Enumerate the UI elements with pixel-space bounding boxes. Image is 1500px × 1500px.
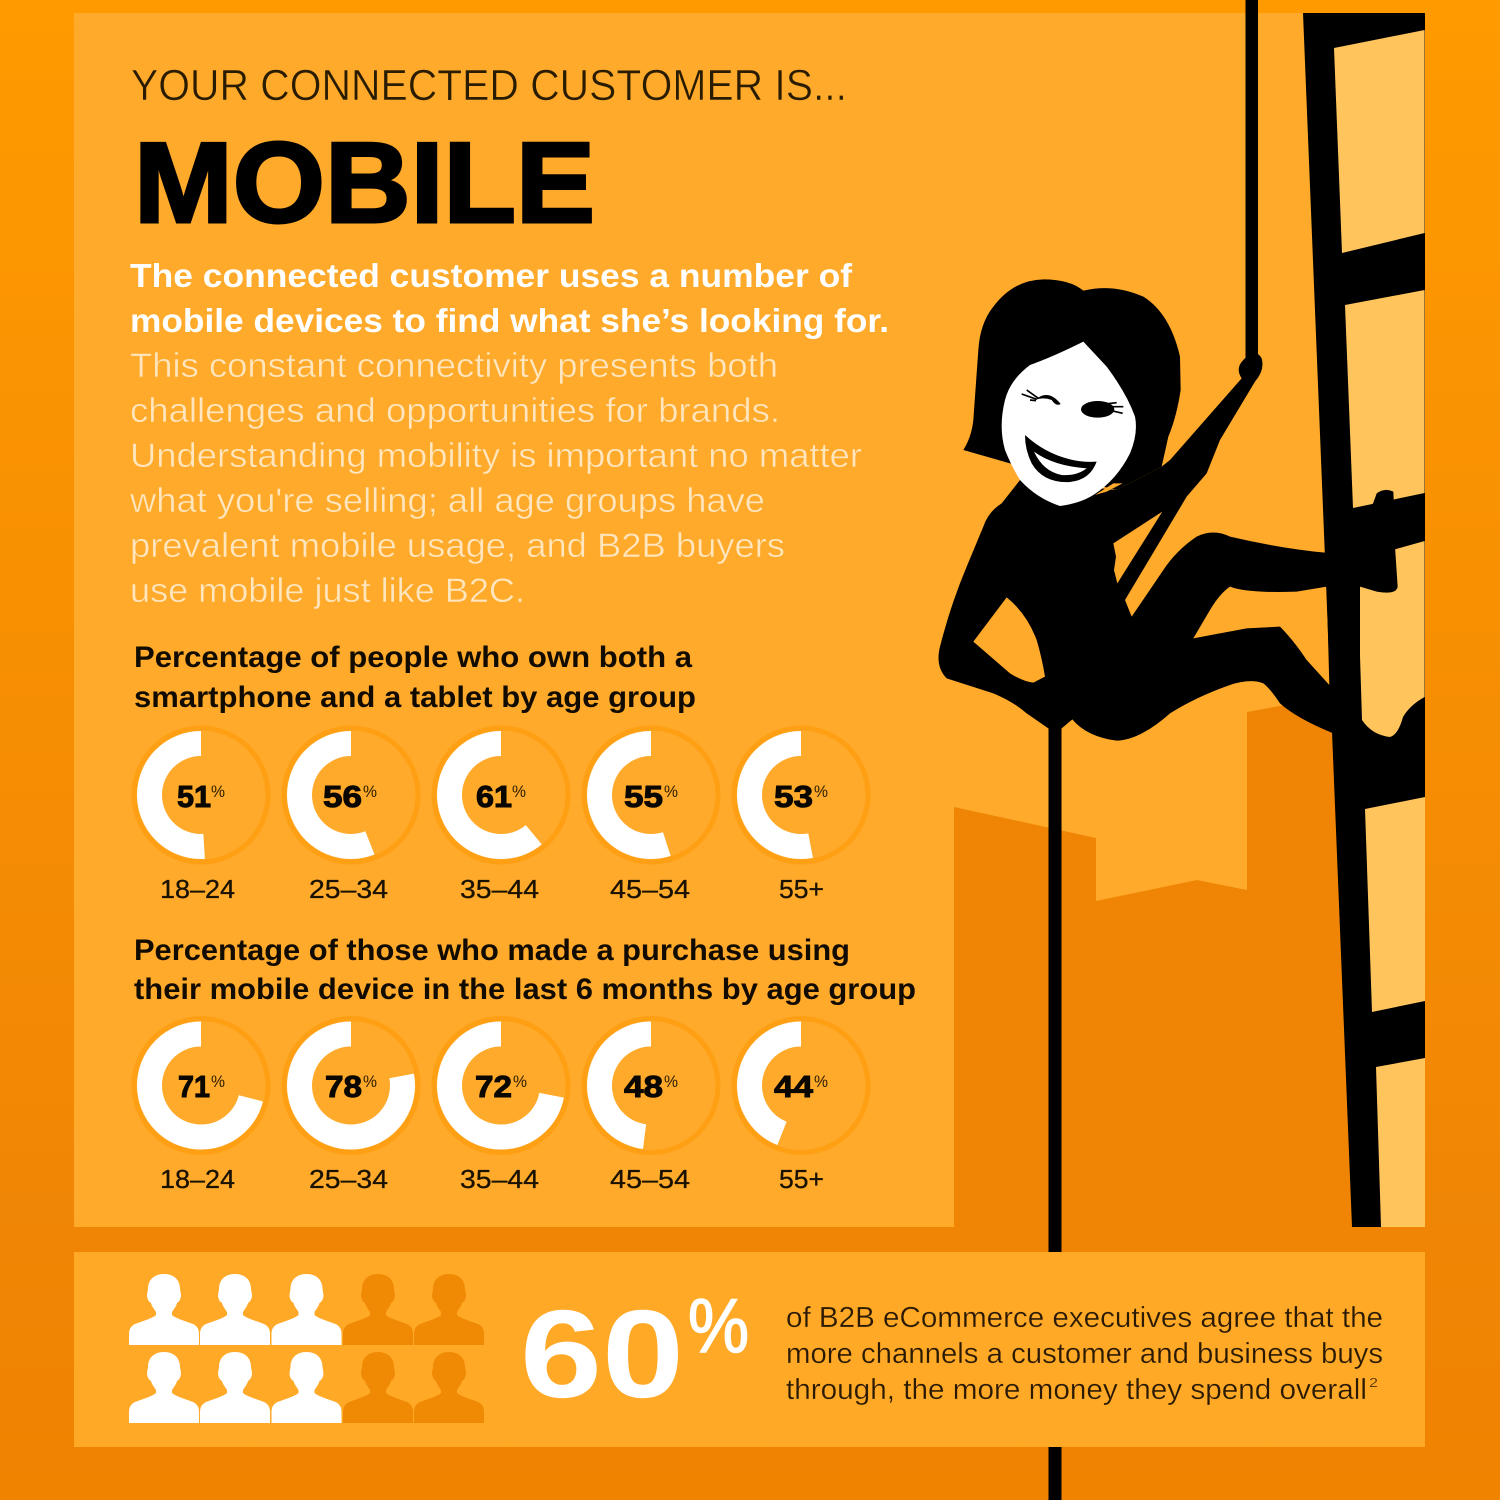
text block: statistic description <box>786 1302 1383 1406</box>
donut: 55+ 44%: 44 <box>774 1069 814 1104</box>
donut: 25-34 78%: 25–34 <box>309 1164 388 1194</box>
donut: 45-54 55% <box>584 728 718 904</box>
donut: 45-54 55%: % <box>664 782 678 801</box>
donut: 18-24 51%: % <box>211 782 225 801</box>
text block: intro bold: mobile devices to find what she’s looking for. <box>130 302 889 339</box>
text block: intro bold <box>130 257 889 339</box>
donut: 25-34 78%: 78 <box>325 1069 362 1104</box>
icon: grid of ten people, six highlighted <box>129 1274 484 1423</box>
donut: 55+ 53%: % <box>814 782 828 801</box>
heading: mobile: MOBILE <box>134 120 595 247</box>
text block: intro body: prevalent mobile usage, and B2B buyers <box>130 527 785 565</box>
big statistic: 60%: % <box>688 1284 749 1369</box>
heading: purchase chart <box>134 934 916 1006</box>
donut: 18-24 71%: 71 <box>178 1069 210 1104</box>
donut: 18-24 51%: 51 <box>177 779 211 814</box>
text block: intro body <box>129 347 862 610</box>
donut: 45-54 55%: 55 <box>624 779 663 814</box>
text block: intro bold: The connected customer uses a number of <box>130 257 853 294</box>
text block: intro body: challenges and opportunities for brands. <box>130 392 780 430</box>
text block: statistic description: of B2B eCommerce executives agree that the <box>786 1302 1383 1334</box>
big statistic: 60%: 60 <box>520 1285 684 1424</box>
donut: 35-44 61%: 35–44 <box>460 874 539 904</box>
donut: 45-54 55%: 45–54 <box>610 874 690 904</box>
donut: 18-24 51% <box>134 728 268 904</box>
heading: ownership chart: Percentage of people who own both a <box>134 641 692 674</box>
donut chart row: mobile purchases <box>134 1018 868 1194</box>
text block: statistic description: 2 <box>1369 1375 1378 1390</box>
donut chart row: smartphone and tablet ownership <box>134 728 868 904</box>
donut: 18-24 71% <box>134 1018 268 1194</box>
title: YOUR CONNECTED CUSTOMER IS... <box>131 61 847 110</box>
donut: 25-34 56%: 56 <box>323 779 362 814</box>
donut: 25-34 56% <box>284 728 418 904</box>
text block: statistic description: more channels a customer and business buys <box>786 1338 1383 1370</box>
donut: 55+ 53% <box>734 728 868 904</box>
main panel <box>74 13 1425 1227</box>
donut: 35-44 61% <box>434 728 568 904</box>
big statistic: 60% <box>520 1284 749 1424</box>
donut: 18-24 71%: % <box>211 1072 225 1091</box>
text block: intro body: Understanding mobility is important no matter <box>130 437 862 475</box>
panel: bottom statistic band <box>74 1252 1425 1447</box>
donut: 45-54 48%: 48 <box>624 1069 663 1104</box>
donut: 35-44 72%: % <box>513 1072 527 1091</box>
text block: intro body: use mobile just like B2C. <box>130 572 525 610</box>
illustration: city buildings <box>954 705 1352 1227</box>
heading: purchase chart: their mobile device in the last 6 months by age group <box>134 973 916 1006</box>
text block: intro body: This constant connectivity presents both <box>130 347 778 385</box>
donut: 55+ 53%: 53 <box>774 779 813 814</box>
donut: 35-44 61%: 61 <box>476 779 512 814</box>
donut: 55+ 44%: % <box>814 1072 828 1091</box>
donut: 25-34 78%: % <box>363 1072 377 1091</box>
donut: 35-44 72% <box>434 1018 568 1194</box>
donut: 25-34 78% <box>284 1018 418 1194</box>
donut: 45-54 48%: 45–54 <box>610 1164 690 1194</box>
donut: 35-44 72%: 72 <box>475 1069 512 1104</box>
illustration: winking woman climbing <box>938 279 1398 741</box>
donut: 55+ 53%: 55+ <box>779 874 824 904</box>
heading: purchase chart: Percentage of those who made a purchase using <box>134 934 850 967</box>
text block: statistic description: through, the more money they spend overall <box>786 1374 1367 1406</box>
donut: 55+ 44%: 55+ <box>779 1164 824 1194</box>
donut: 55+ 44% <box>734 1018 868 1194</box>
donut: 35-44 72%: 35–44 <box>460 1164 539 1194</box>
text block: intro body: what you're selling; all age groups have <box>129 482 765 520</box>
illustration: climbing rope <box>1048 0 1258 1500</box>
donut: 25-34 56%: % <box>363 782 377 801</box>
illustration: ladder <box>1303 13 1425 1227</box>
heading: ownership chart: smartphone and a tablet by age group <box>134 681 696 714</box>
donut: 35-44 61%: % <box>512 782 526 801</box>
donut: 25-34 56%: 25–34 <box>309 874 388 904</box>
heading: ownership chart <box>134 641 696 714</box>
donut: 45-54 48%: % <box>664 1072 678 1091</box>
donut: 18-24 71%: 18–24 <box>160 1164 235 1194</box>
donut: 45-54 48% <box>584 1018 718 1194</box>
donut: 18-24 51%: 18–24 <box>160 874 235 904</box>
